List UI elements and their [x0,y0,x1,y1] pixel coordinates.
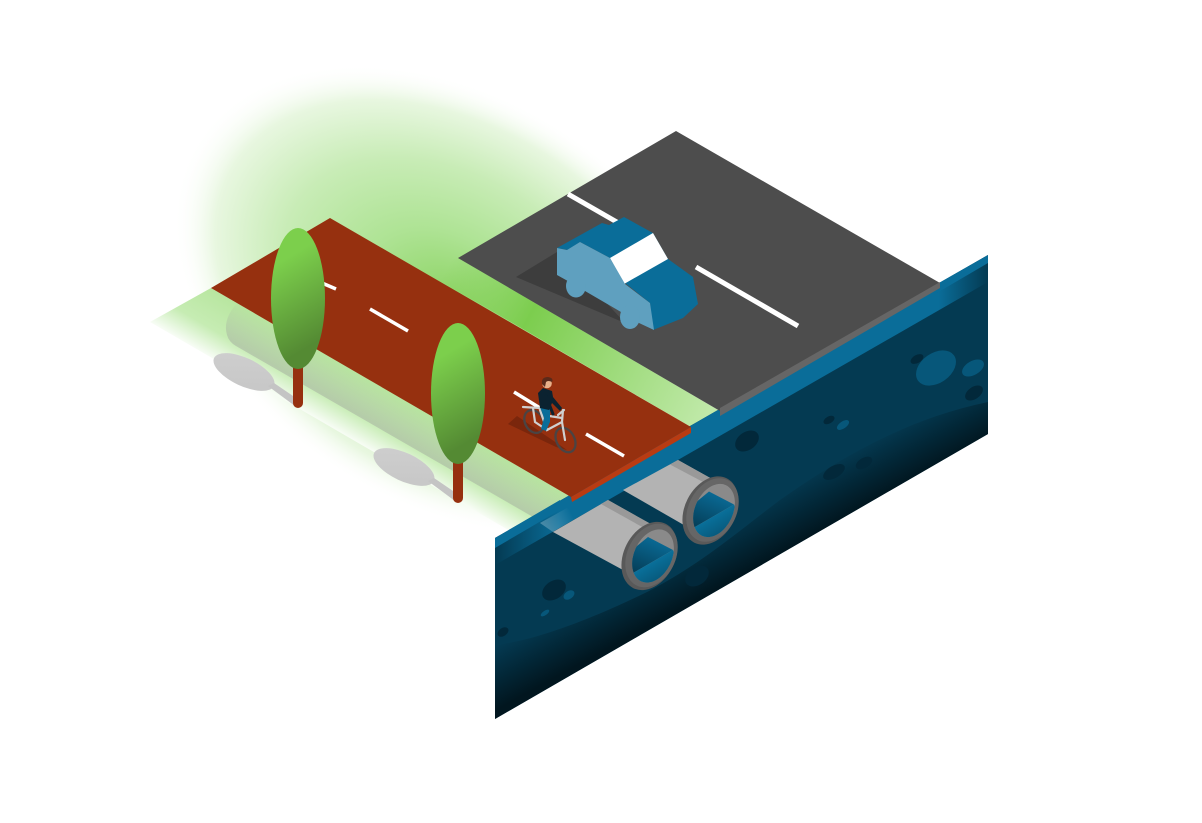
pipe 2 top shade [670,460,712,483]
pipe 1 outer ring [610,512,689,600]
tree shadow 1 [208,345,296,406]
pipe 2 opening [693,484,735,538]
pipe 1 body [553,500,652,570]
pipe 1 [553,500,678,590]
tree 1 crown [271,228,325,369]
cyclist near arm [546,396,553,414]
tree 2 crown [431,323,485,464]
pipe 1 opening [632,530,674,583]
asphalt road [458,131,940,411]
cyclist hair [542,377,552,387]
green glow background [87,0,813,633]
pipe 1 top shade [601,500,651,528]
bicycle frame [523,407,565,440]
tree shadow 2 [368,440,456,501]
car front wheel [620,305,640,329]
cyclist leg [540,407,550,431]
gray ground shadow [226,300,590,521]
road lane markings [568,194,798,326]
band highlight [540,508,580,532]
tree 2 [431,323,485,503]
pipe 2 [623,460,739,545]
cycle path edge [571,427,691,502]
bicycle wheels [520,407,580,456]
green strip between path and road [420,258,720,427]
cyclist head [542,379,552,388]
road edge [720,282,940,416]
car shadow [516,252,625,323]
band top strip right [930,255,988,297]
tree 1 trunk [293,360,303,408]
soil stones [496,343,987,639]
pipe 2 body [623,460,713,524]
cyclist torso [538,388,562,411]
car windshield [610,233,668,284]
tree 1 [271,228,325,408]
tree 2 trunk [453,455,463,503]
band top strip left [495,500,560,548]
car top [557,217,698,330]
cycle path [211,218,691,497]
car rear wheel [566,274,586,298]
pipe 2 outer ring [671,467,750,554]
illustration: isometric street cross-section [150,82,988,719]
car side [557,242,654,330]
soil wall [495,255,988,719]
pipe 2 front ring [676,469,749,551]
pipe 1 front ring [615,515,688,596]
wall top band [495,255,988,565]
cycle path lane markings [322,283,624,456]
cyclist [508,377,580,456]
car [516,217,698,330]
green verge beside cycle path [150,288,571,531]
cyclist shadow [508,416,567,450]
deep soil gradient [495,402,988,719]
